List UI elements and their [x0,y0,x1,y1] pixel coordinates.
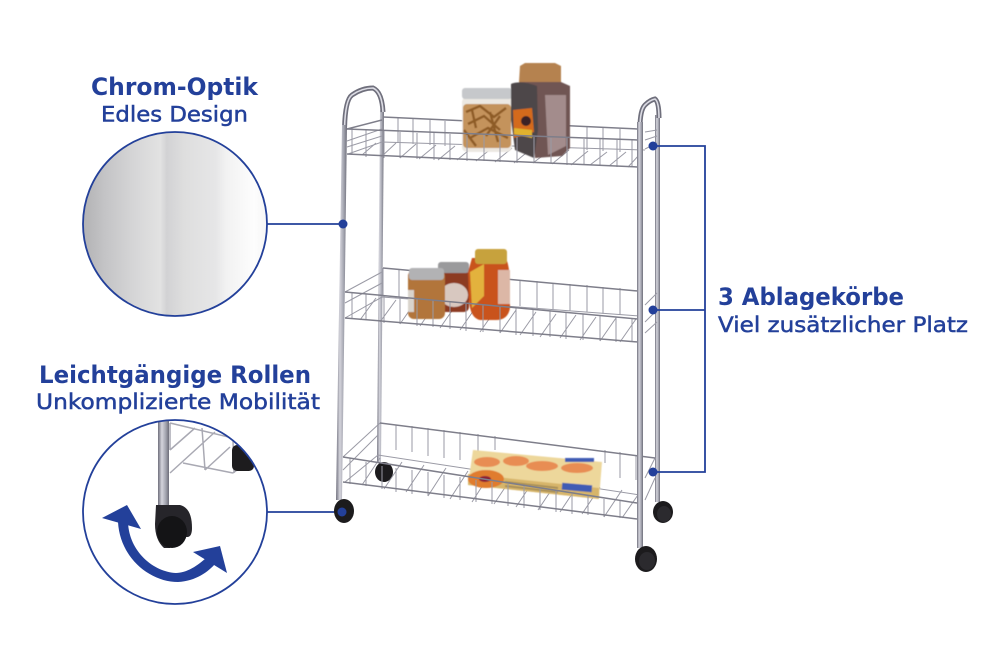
product: wire trolley [334,63,673,572]
product on bottom shelf: biscuit box [468,450,602,499]
front posts and handles [336,88,659,548]
heading: 3 Ablagekörbe [718,283,968,338]
icon: rotation arrows [102,505,227,582]
heading: Leichtgängige Rollen: Unkomplizierte Mobilität [36,390,320,415]
callout line: castor [267,511,343,513]
heading: Chrom-Optik: Chrom-Optik [91,73,259,101]
chrome marker dot [338,220,348,228]
basket backs [343,117,657,518]
callout line: chrome [267,223,343,225]
panel: chrome texture circle [83,132,267,316]
products on top shelf [462,63,570,158]
honey jar [468,249,510,320]
heading: 3 Ablagekörbe: 3 Ablagekörbe [718,283,904,311]
heading: Leichtgängige Rollen: Leichtgängige Rollen [39,361,311,389]
front castors [334,499,657,572]
back posts [377,110,660,502]
panel: castor detail circle [83,415,270,604]
basket fronts [343,129,638,519]
heading: Chrom-Optik [91,73,259,128]
heading: 3 Ablagekörbe: Viel zusätzlicher Platz [718,313,968,338]
back castors [375,462,673,523]
heading: Leichtgängige Rollen [36,361,320,415]
jar of crisps [462,88,512,152]
castor marker dot [338,508,346,516]
heading: Chrom-Optik: Edles Design [101,102,248,128]
jam jar one [438,262,469,312]
products on middle shelf [408,249,510,320]
bracket: three baskets callout [648,142,705,476]
jam jar two [408,268,445,319]
coffee jar [511,63,570,158]
